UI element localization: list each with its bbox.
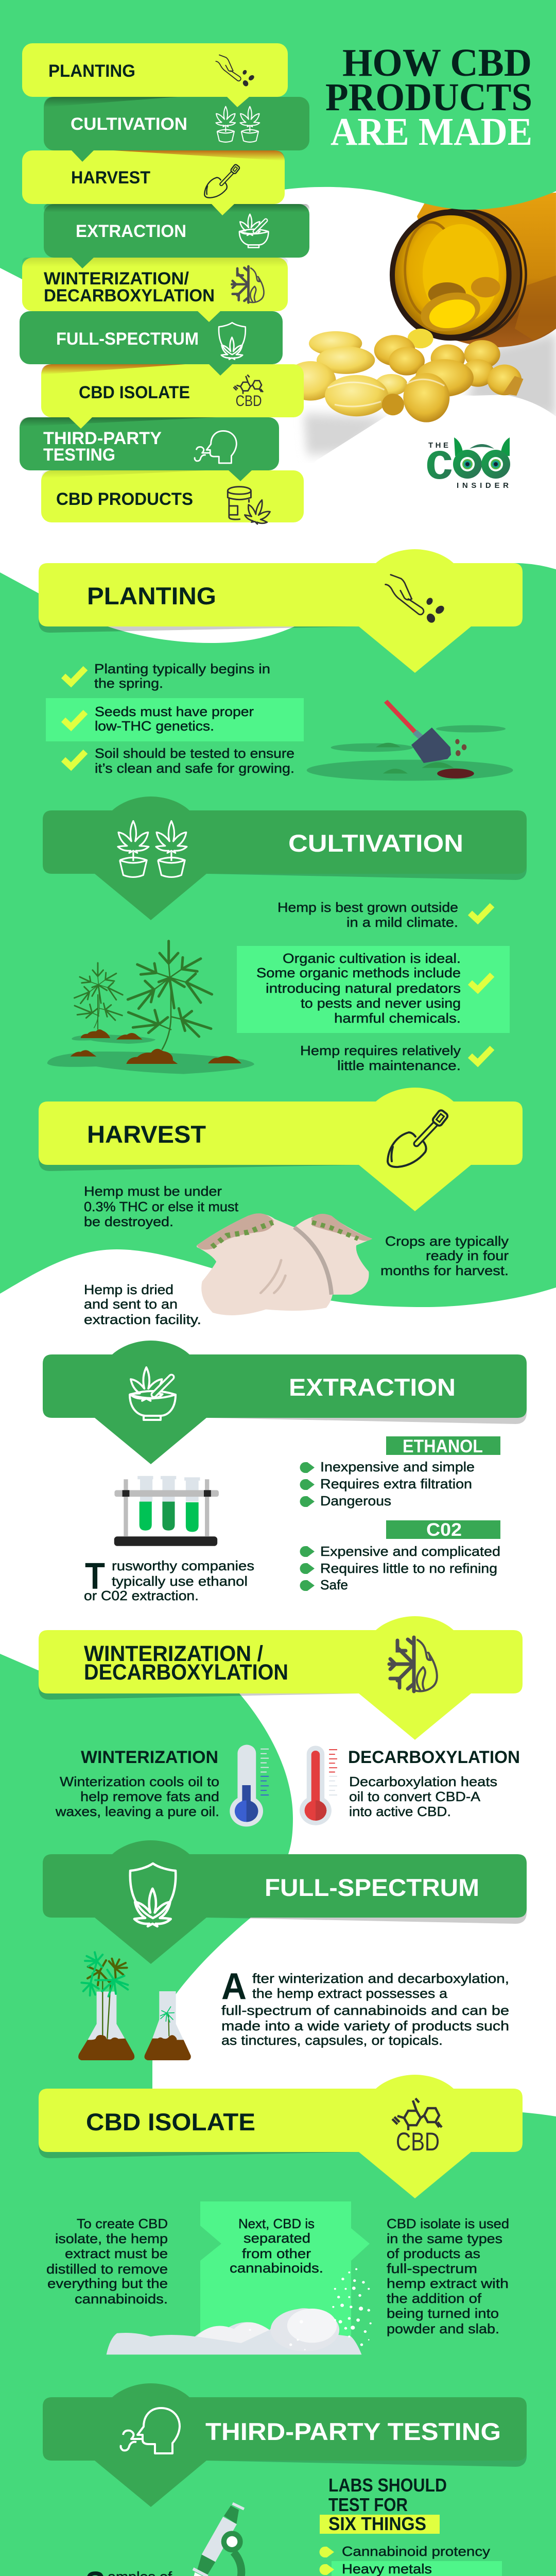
isolate step texts: being turned into	[387, 2306, 499, 2321]
winterization text: WINTERIZATION	[81, 1748, 218, 1767]
cultivation facts checklist: in a mild climate.	[346, 914, 458, 930]
isolate step texts: from other	[242, 2246, 311, 2261]
logo: The CBD Insider: INSIDER	[457, 481, 509, 490]
full-spectrum paragraph with drop cap: fter winterization and decarboxylation,	[252, 1971, 509, 1986]
cultivation facts checklist: little maintenance.	[337, 1058, 461, 1073]
heading band: winterization / decarboxylation: WINTERIZATION /	[84, 1641, 263, 1666]
heading band: planting: PLANTING	[87, 582, 216, 609]
title: ARE MADE	[331, 110, 532, 154]
planting facts checklist: Seeds must have proper	[95, 704, 254, 719]
ethanol pros and cons: Dangerous	[320, 1493, 391, 1509]
extraction paragraph with drop cap: rusworthy companies	[112, 1558, 254, 1573]
heading band: winterization / decarboxylation: DECARBOXYLATION	[84, 1660, 288, 1685]
contents list: full-spectrum item	[20, 311, 283, 376]
contents list: extraction item: EXTRACTION	[76, 222, 186, 241]
heading band: harvest: HARVEST	[87, 1121, 206, 1148]
full-spectrum paragraph with drop cap: as tinctures, capsules, or topicals.	[221, 2032, 443, 2048]
isolate step texts: hemp extract with	[387, 2276, 509, 2291]
contents list: winterization item: DECARBOXYLATION	[44, 286, 215, 306]
contents list: CBD products item: CBD PRODUCTS	[56, 489, 193, 509]
contents list: third-party testing item	[20, 417, 279, 481]
isolate step texts: isolate, the hemp	[55, 2231, 168, 2246]
isolate step texts: the addition of	[387, 2291, 482, 2306]
winterization text	[55, 1748, 219, 1819]
C02 pros and cons: Safe	[320, 1577, 348, 1592]
planting facts checklist: Soil should be tested to ensure	[95, 745, 294, 761]
cultivation facts checklist: Some organic methods include	[256, 965, 461, 980]
C02 pros and cons: C02	[426, 1520, 462, 1540]
heading band: third-party testing	[43, 2383, 527, 2507]
title: HOW CBD	[342, 41, 532, 84]
harvest facts text: Crops are typically	[385, 1233, 509, 1249]
illustration: harvest sacks	[197, 1213, 372, 1315]
icon: cold thermometer	[230, 1745, 269, 1826]
photo: amber bottle with spilled softgel capsules	[273, 193, 556, 494]
harvest facts text	[84, 1183, 509, 1327]
ethanol pros and cons: Requires extra filtration	[320, 1476, 472, 1492]
harvest facts text: months for harvest.	[380, 1263, 509, 1278]
extraction paragraph with drop cap	[84, 1556, 254, 1603]
harvest facts text: be destroyed.	[84, 1214, 173, 1229]
cultivation facts checklist: Hemp is best grown outside	[277, 900, 458, 915]
cultivation facts checklist: Organic cultivation is ideal.	[283, 951, 461, 966]
illustration: hemp plants in soil	[47, 941, 254, 1074]
heading band: CBD isolate: CBD ISOLATE	[86, 2108, 255, 2136]
decarboxylation text	[348, 1748, 520, 1819]
isolate step texts: distilled to remove	[46, 2261, 168, 2277]
C02 pros and cons: Requires little to no refining	[320, 1561, 497, 1576]
planting facts checklist: it’s clean and safe for growing.	[95, 760, 294, 776]
contents list: full-spectrum item: FULL-SPECTRUM	[56, 329, 199, 349]
harvest facts text: Hemp must be under	[84, 1183, 222, 1199]
title	[325, 41, 532, 154]
ethanol pros and cons: Inexpensive and simple	[320, 1459, 475, 1475]
cultivation facts checklist: Hemp requires relatively	[300, 1043, 461, 1058]
contents list: cultivation item	[44, 97, 309, 162]
heading band: full-spectrum	[43, 1840, 527, 1964]
C02 pros and cons: Expensive and complicated	[320, 1544, 500, 1559]
isolate step texts: cannabinoids.	[230, 2260, 323, 2276]
contents list: third-party testing item: TESTING	[43, 445, 115, 465]
contents list: winterization item: WINTERIZATION/	[44, 269, 189, 289]
contents list: third-party testing item: THIRD-PARTY	[43, 429, 162, 448]
heading band: third-party testing: THIRD-PARTY TESTING	[205, 2418, 501, 2445]
contents list: planting item: PLANTING	[48, 61, 135, 81]
planting facts checklist: Planting typically begins in	[94, 661, 270, 676]
testing paragraph with drop cap	[85, 2565, 243, 2576]
harvest facts text: and sent to an	[84, 1296, 178, 1312]
illustration: plants growing in flasks	[78, 1952, 191, 2060]
logo: The CBD Insider	[425, 432, 510, 490]
top green wave background	[0, 0, 556, 297]
harvest facts text: extraction facility.	[84, 1312, 201, 1327]
heading band: planting	[39, 549, 523, 673]
C02 pros and cons	[300, 1520, 500, 1592]
contents list: winterization item	[22, 258, 288, 322]
labs should test for six things list: Cannabinoid protency	[342, 2544, 490, 2559]
decarboxylation text: DECARBOXYLATION	[348, 1748, 520, 1767]
decarboxylation text: Decarboxylation heats	[349, 1774, 497, 1789]
cultivation facts checklist: harmful chemicals.	[334, 1010, 461, 1026]
ethanol pros and cons	[300, 1436, 500, 1509]
harvest facts text: ready in four	[426, 1248, 509, 1263]
contents list: CBD isolate item	[41, 364, 304, 429]
decarboxylation text: oil to convert CBD-A	[349, 1789, 481, 1804]
decarboxylation text: into active CBD.	[349, 1804, 451, 1819]
labs should test for six things list: TEST FOR	[328, 2494, 408, 2515]
winterization text: waxes, leaving a pure oil.	[55, 1804, 219, 1819]
full-spectrum paragraph with drop cap: A	[221, 1966, 247, 2007]
planting facts checklist: the spring.	[94, 675, 163, 691]
section background: green blob winterization to products	[0, 1654, 556, 2576]
full-spectrum paragraph with drop cap	[221, 1966, 509, 2048]
illustration: CBD isolate powder and slab	[107, 2268, 372, 2354]
contents list: CBD products item	[41, 470, 304, 527]
ethanol pros and cons: ETHANOL	[403, 1436, 483, 1456]
extraction paragraph with drop cap: or C02 extraction.	[84, 1588, 199, 1603]
illustration: shovel digging a hole	[307, 701, 513, 781]
icon: hot thermometer	[300, 1745, 337, 1825]
heading band: extraction: EXTRACTION	[289, 1374, 456, 1401]
labs should test for six things list	[319, 2475, 502, 2576]
highlighted arrow panel: isolate middle step	[200, 2201, 370, 2349]
winterization text: Winterization cools oil to	[60, 1774, 219, 1789]
harvest facts text: 0.3% THC or else it must	[84, 1199, 239, 1214]
heading band: extraction	[43, 1341, 527, 1464]
isolate step texts: powder and slab.	[387, 2321, 499, 2336]
logo: The CBD Insider: c	[425, 432, 453, 490]
heading band: cultivation	[43, 796, 527, 920]
section background: green wave planting to harvest	[0, 563, 556, 1307]
illustration: test tubes in rack	[114, 1476, 219, 1546]
title: PRODUCTS	[325, 76, 532, 119]
contents list: planting item	[22, 43, 288, 107]
cultivation facts checklist: introducing natural predators	[266, 980, 461, 996]
contents list: harvest item	[22, 150, 285, 215]
contents list: CBD isolate item: CBD	[236, 393, 262, 410]
heading band: full-spectrum: FULL-SPECTRUM	[265, 1874, 479, 1901]
isolate step texts: of products as	[387, 2246, 480, 2261]
contents list: harvest item: HARVEST	[71, 168, 150, 188]
isolate step texts	[46, 2216, 509, 2336]
planting facts checklist	[46, 661, 304, 776]
heading band: CBD isolate: CBD	[396, 2127, 440, 2156]
isolate step texts: Next, CBD is	[238, 2216, 315, 2231]
isolate step texts: separated	[244, 2230, 310, 2246]
extraction paragraph with drop cap: T	[85, 1556, 105, 1597]
contents list: cultivation item: CULTIVATION	[71, 114, 187, 134]
isolate step texts: cannabinoids.	[75, 2291, 168, 2307]
isolate step texts: full-spectrum	[387, 2261, 477, 2276]
planting facts checklist: low-THC genetics.	[95, 718, 214, 734]
labs should test for six things list: LABS SHOULD	[328, 2475, 447, 2496]
labs should test for six things list: SIX THINGS	[328, 2513, 426, 2534]
heading band: winterization / decarboxylation	[39, 1616, 523, 1740]
cultivation facts checklist	[237, 900, 510, 1073]
harvest facts text: Hemp is dried	[84, 1282, 173, 1297]
full-spectrum paragraph with drop cap: made into a wide variety of products such	[221, 2018, 509, 2033]
extraction paragraph with drop cap: typically use ethanol	[112, 1573, 248, 1589]
full-spectrum paragraph with drop cap: full-spectrum of cannabinoids and can be	[221, 2003, 509, 2018]
isolate step texts: everything but the	[47, 2276, 168, 2291]
heading band: CBD isolate	[39, 2075, 523, 2198]
isolate step texts: To create CBD	[77, 2216, 168, 2231]
winterization text: help remove fats and	[80, 1789, 219, 1804]
heading band: harvest	[39, 1088, 523, 1211]
heading band: cultivation: CULTIVATION	[288, 829, 463, 857]
logo: The CBD Insider: THE	[428, 441, 448, 450]
isolate step texts: extract must be	[65, 2246, 168, 2261]
contents list: extraction item	[44, 204, 309, 268]
cultivation facts checklist: to pests and never using	[301, 995, 461, 1011]
isolate step texts: CBD isolate is used	[387, 2216, 509, 2231]
illustration: microscope	[173, 2503, 244, 2576]
contents list: CBD isolate item: CBD ISOLATE	[79, 383, 190, 402]
full-spectrum paragraph with drop cap: the hemp extract possesses a	[252, 1986, 448, 2001]
isolate step texts: in the same types	[387, 2231, 502, 2246]
